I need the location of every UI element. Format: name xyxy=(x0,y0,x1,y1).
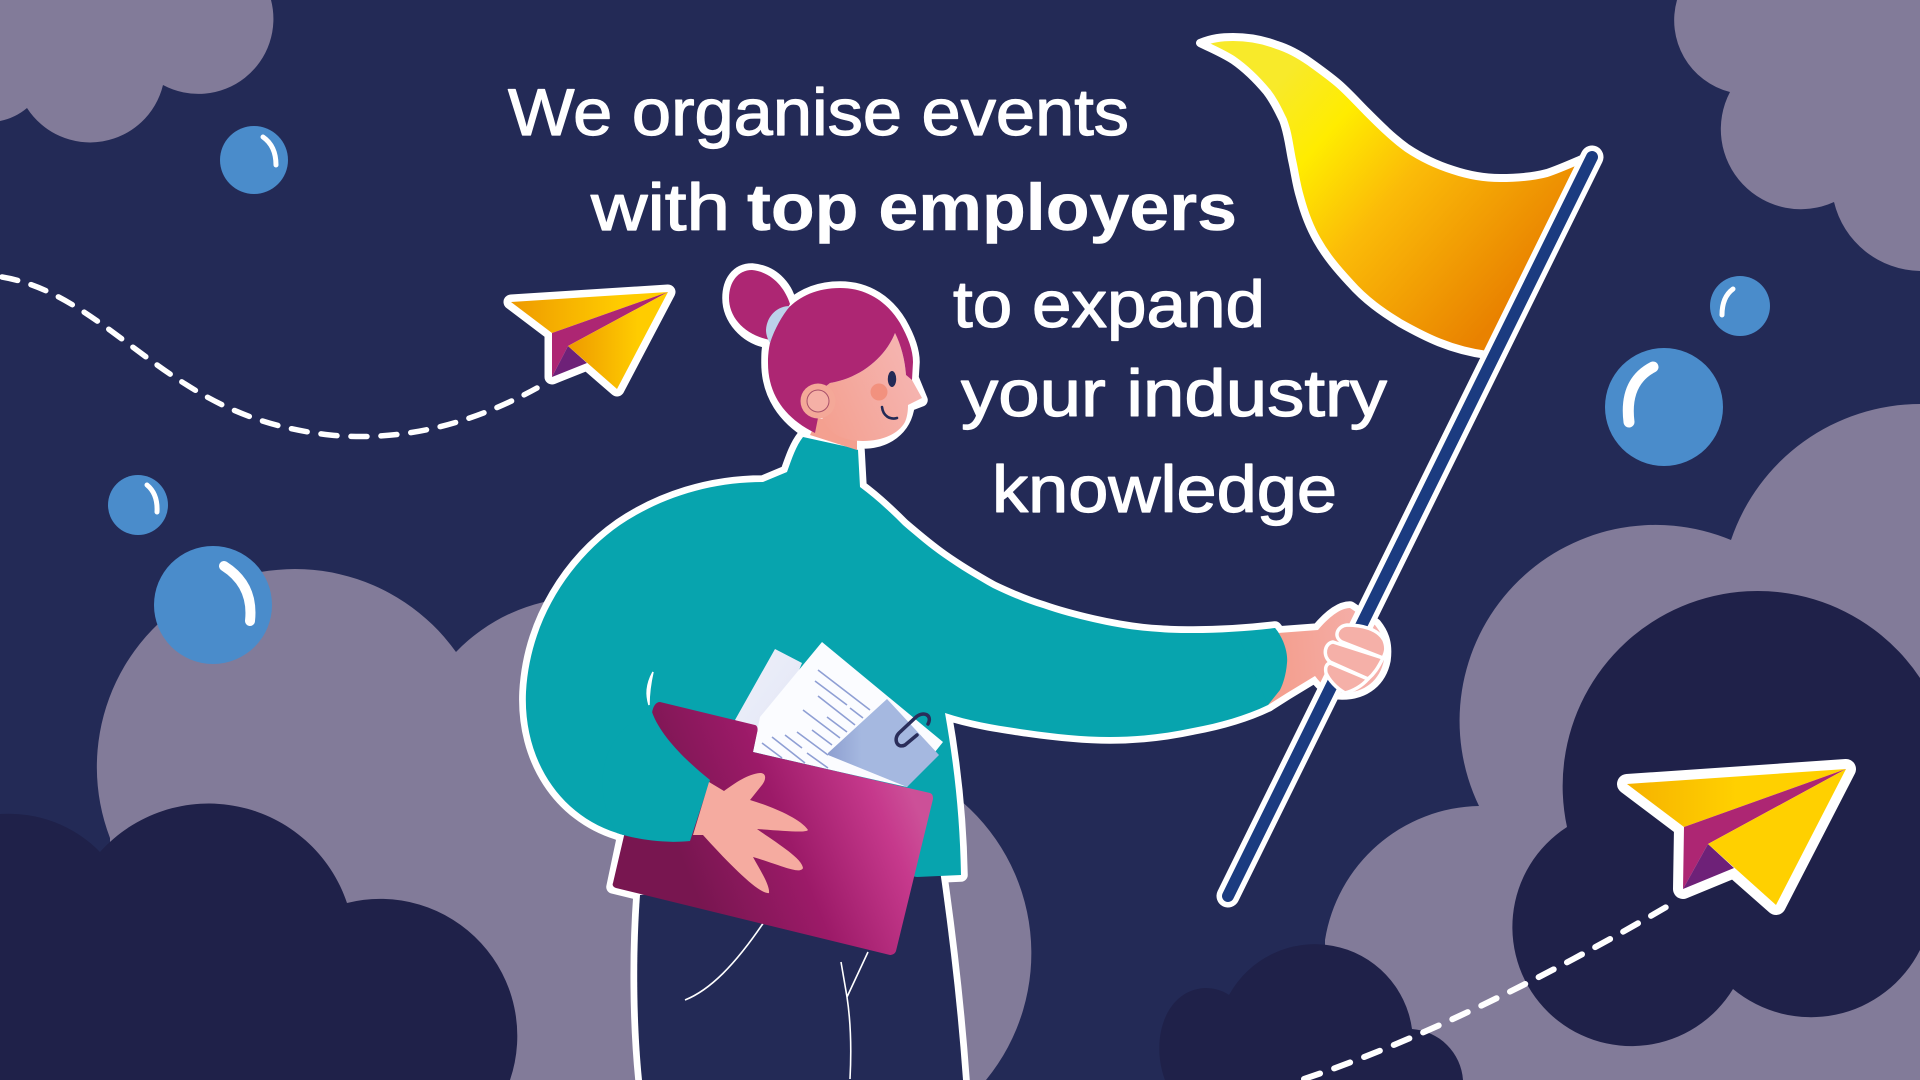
title text: with xyxy=(590,170,730,244)
cloud: bottom left light xyxy=(97,569,1031,1080)
sweater xyxy=(526,437,1287,877)
bubble: left small xyxy=(108,475,168,535)
left hand xyxy=(693,773,808,893)
paper clip xyxy=(896,714,929,746)
bubble: left large xyxy=(154,546,272,664)
left sleeve over folder xyxy=(602,712,710,842)
cloud: right light xyxy=(1325,404,1920,1080)
person xyxy=(526,270,1385,1080)
dashed flight path: right xyxy=(1304,906,1668,1079)
sleeve crease xyxy=(647,672,653,705)
cloud: top left xyxy=(0,0,273,142)
right cuff xyxy=(1240,628,1287,705)
cloud: bottom centre dark xyxy=(1159,944,1463,1080)
title text: to expand xyxy=(953,267,1265,341)
title text: We organise events xyxy=(508,75,1129,149)
cloud: bottom left dark xyxy=(0,804,517,1080)
bubble: top right small xyxy=(1710,276,1770,336)
title text: your industry xyxy=(961,356,1387,430)
eye xyxy=(888,371,896,387)
folder xyxy=(613,702,933,955)
trousers xyxy=(637,870,963,1080)
hair bun xyxy=(729,270,790,340)
paper plane: left xyxy=(511,292,668,389)
dashed flight path: left xyxy=(2,277,537,437)
title text: knowledge xyxy=(992,452,1337,526)
title text xyxy=(508,75,1387,526)
papers xyxy=(735,642,943,787)
right hand fingers xyxy=(1325,625,1386,693)
paper plane: right xyxy=(1627,769,1846,905)
cloud: top right xyxy=(1674,0,1920,271)
right hand palm xyxy=(1268,608,1385,705)
flag pole xyxy=(1228,157,1592,896)
trouser crease lines xyxy=(685,922,868,1079)
title text: top employers xyxy=(747,170,1237,244)
person outline xyxy=(526,270,1385,1080)
scrunchie xyxy=(766,306,790,343)
ear xyxy=(800,384,836,418)
bubble: right large xyxy=(1605,348,1723,466)
blush xyxy=(870,384,888,400)
cloud: right dark xyxy=(1512,591,1920,1046)
neck and face xyxy=(810,333,922,450)
hair xyxy=(768,288,913,433)
flag xyxy=(1200,37,1584,355)
smile xyxy=(882,407,897,419)
bubble: top left xyxy=(220,126,288,194)
